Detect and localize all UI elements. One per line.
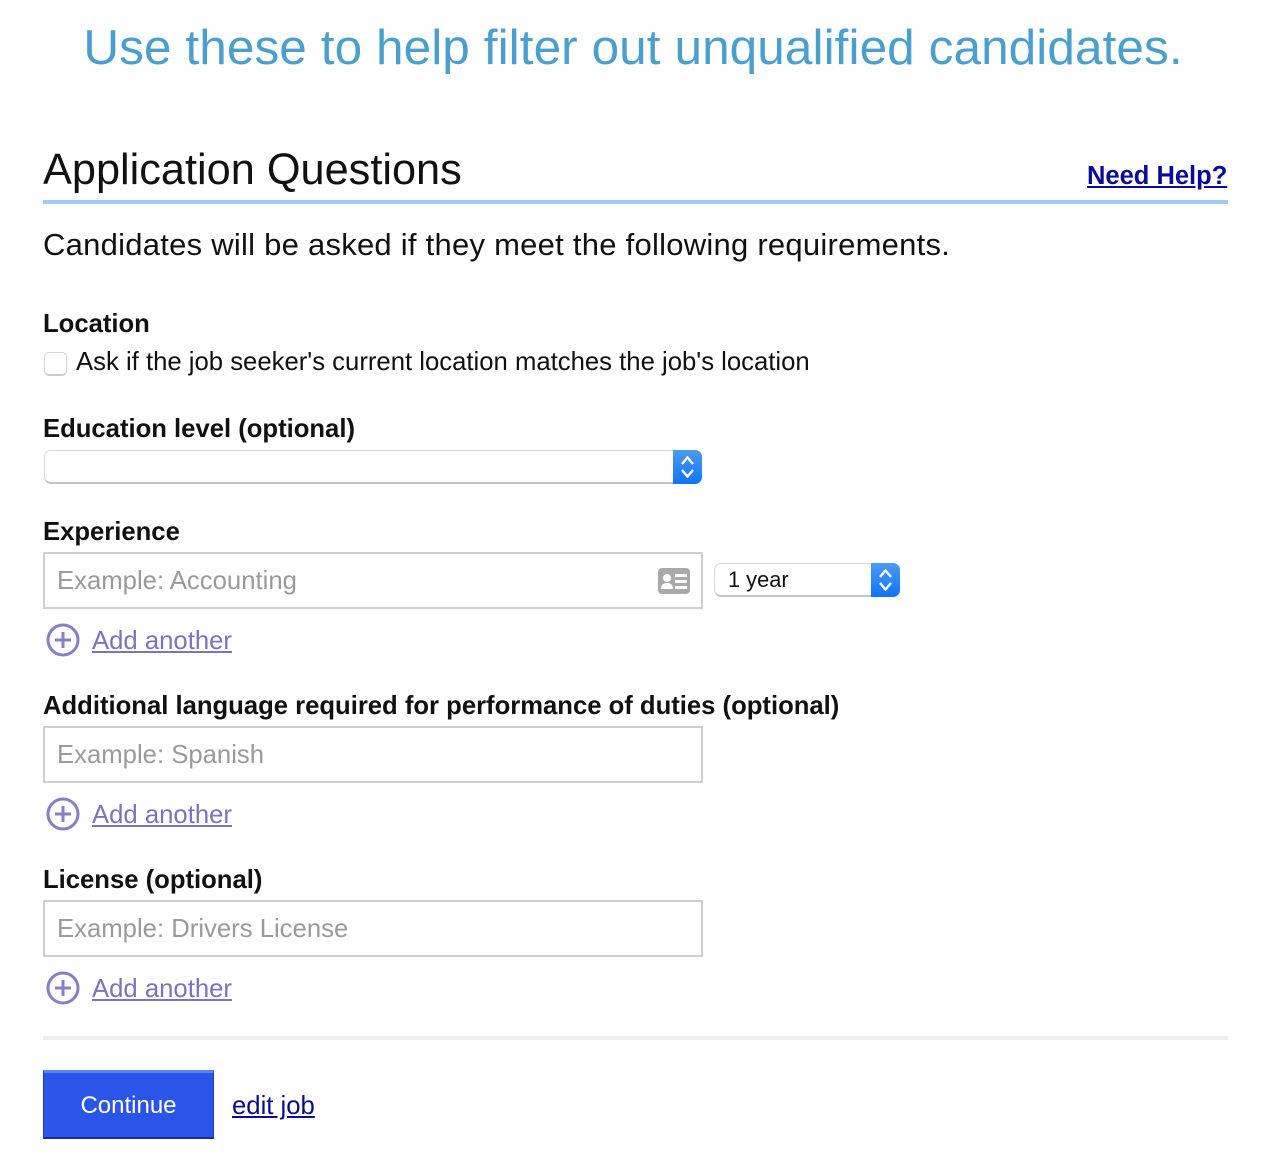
add another link (46, 798, 232, 830)
label: Experience: Experience (43, 518, 180, 546)
checkbox (44, 352, 67, 376)
label: Education level: Education level (optional) (43, 415, 355, 443)
placeholder: Example: Accounting (57, 567, 297, 595)
continue button: Continue (80, 1092, 177, 1119)
intro text: Candidates will be asked if they meet the following requirements. (43, 227, 950, 262)
experience input (43, 552, 703, 609)
icon: plus circle (46, 972, 80, 1004)
add another link: Add another (92, 627, 232, 655)
add another link: Add another (92, 801, 232, 829)
license input (43, 900, 703, 957)
select stepper (673, 450, 702, 484)
education select (44, 450, 702, 484)
continue button (43, 1070, 214, 1139)
select stepper (871, 563, 900, 597)
add another link (46, 624, 232, 656)
label: Additional language: Additional language required for performance of duties (optional) (43, 692, 839, 720)
help link: Need Help? (1087, 162, 1227, 190)
add another link (46, 972, 232, 1004)
heading: Application Questions: Application Questions (43, 146, 462, 194)
selected value: 1 year (728, 567, 789, 592)
edit job link: edit job (232, 1092, 315, 1120)
placeholder: Example: Drivers License (57, 915, 348, 943)
icon: plus circle (46, 624, 80, 656)
title: Use these to help filter out unqualified candidates. (83, 20, 1183, 75)
years select (714, 563, 900, 597)
checkbox label: Ask if the job seeker's current location matches the job's location (76, 348, 810, 376)
language input (43, 726, 703, 783)
icon: plus circle (46, 798, 80, 830)
icon: contact card (658, 568, 690, 594)
add another link: Add another (92, 975, 232, 1003)
label: License: License (optional) (43, 866, 262, 894)
placeholder: Example: Spanish (57, 741, 264, 769)
label: Location: Location (43, 310, 150, 338)
